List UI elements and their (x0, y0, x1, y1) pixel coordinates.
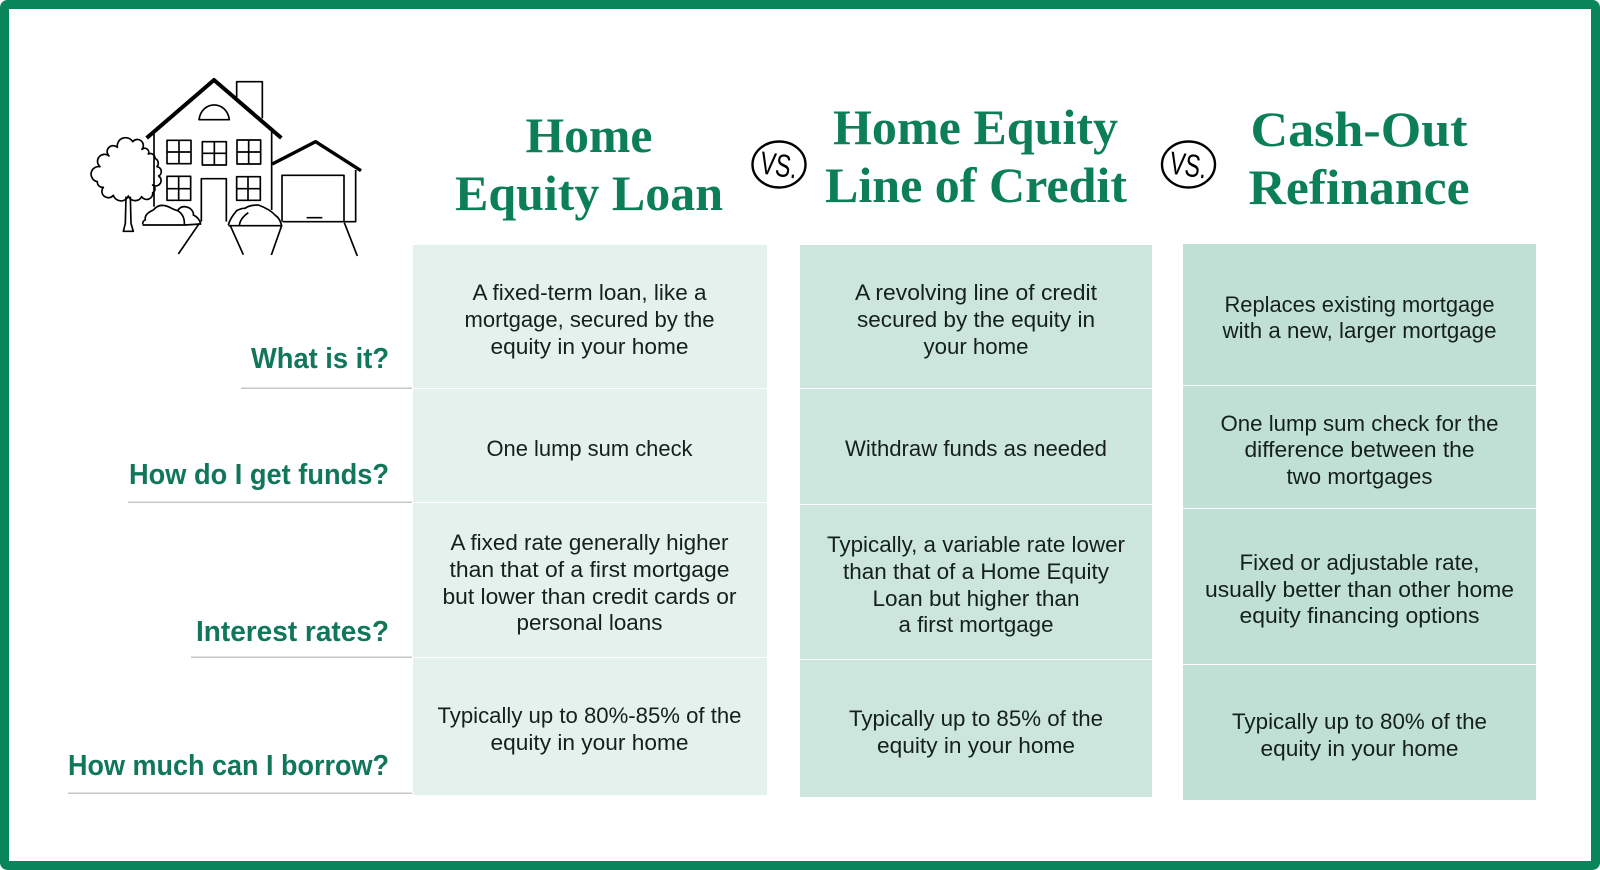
cell: funds: One lump sum check (486, 436, 693, 461)
label: Interest rates?: Interest rates? (196, 616, 389, 648)
cell: rates: a first mortgage (898, 612, 1054, 637)
heading: Home Equity Loan (455, 107, 723, 221)
heading: Home Equity Loan: Home (526, 107, 652, 163)
cell: what is it: A revolving line of credit (855, 280, 1097, 305)
heading: Home Equity Line of Credit: Line of Credit (825, 157, 1127, 213)
icon: vs badge 1: VS. (758, 145, 800, 185)
cell: funds: difference between the (1244, 437, 1474, 462)
heading: Home Equity Loan: Equity Loan (455, 165, 723, 221)
cell: rates: than that of a first mortgage (450, 557, 730, 582)
cell: what is it: Replaces existing mortgage (1224, 292, 1494, 317)
icon: vs badge 2: VS. (1168, 145, 1209, 185)
icon: house illustration (91, 80, 361, 256)
cell: rates: Loan but higher than (872, 586, 1080, 611)
panel: Home Equity Line of Credit column (800, 245, 1152, 797)
cell: borrow: Typically up to 80%-85% of the (438, 703, 742, 728)
cell: borrow: equity in your home (1260, 736, 1458, 761)
cell: borrow: equity in your home (877, 733, 1075, 758)
cell: borrow (1183, 665, 1536, 800)
cell: what is it: with a new, larger mortgage (1221, 318, 1496, 343)
cell: funds (800, 389, 1152, 504)
label: How do I get funds?: How do I get funds? (129, 459, 389, 491)
cell: funds: Withdraw funds as needed (845, 436, 1107, 461)
cell: what is it: mortgage, secured by the (464, 307, 714, 332)
cell: what is it (413, 245, 767, 388)
cell: funds: One lump sum check for the (1220, 411, 1498, 436)
cell: rates: than that of a Home Equity (843, 559, 1109, 584)
cell: rates: A fixed rate generally higher (450, 530, 728, 555)
heading: Home Equity Line of Credit: Home Equity (833, 99, 1118, 155)
cell: borrow (800, 660, 1152, 797)
cell: borrow: Typically up to 80% of the (1232, 709, 1487, 734)
cell: rates (800, 505, 1152, 659)
cell: what is it (1183, 244, 1536, 385)
cell: what is it: equity in your home (490, 334, 688, 359)
cell: funds: two mortgages (1286, 464, 1432, 489)
cell: rates: Typically, a variable rate lower (827, 532, 1125, 557)
cell: rates: usually better than other home (1205, 577, 1514, 602)
row labels column (68, 343, 412, 794)
heading: Cash-Out Refinance: Refinance (1248, 159, 1470, 215)
heading: Cash-Out Refinance (1248, 101, 1470, 215)
cell: what is it: your home (924, 334, 1028, 359)
panel: Cash-Out Refinance column (1183, 244, 1536, 800)
cell: rates: but lower than credit cards or (442, 584, 736, 609)
cell: borrow (413, 658, 767, 795)
heading: Cash-Out Refinance: Cash-Out (1250, 101, 1468, 157)
cell: rates: Fixed or adjustable rate, (1240, 550, 1480, 575)
panel: Home Equity Loan column (413, 245, 767, 795)
label: How much can I borrow?: How much can I borrow? (68, 750, 389, 782)
cell: rates: equity financing options (1240, 603, 1480, 628)
heading: Home Equity Line of Credit (825, 99, 1127, 213)
label: What is it?: What is it? (251, 343, 389, 375)
cell: what is it: A fixed-term loan, like a (472, 280, 707, 305)
cell: rates (1183, 509, 1536, 664)
cell: funds (413, 389, 767, 502)
cell: borrow: equity in your home (490, 730, 688, 755)
cell: what is it: secured by the equity in (857, 307, 1095, 332)
cell: borrow: Typically up to 85% of the (849, 706, 1103, 731)
cell: what is it (800, 245, 1152, 388)
cell: rates (413, 503, 767, 657)
cell: funds (1183, 386, 1536, 508)
cell: rates: personal loans (516, 610, 662, 635)
